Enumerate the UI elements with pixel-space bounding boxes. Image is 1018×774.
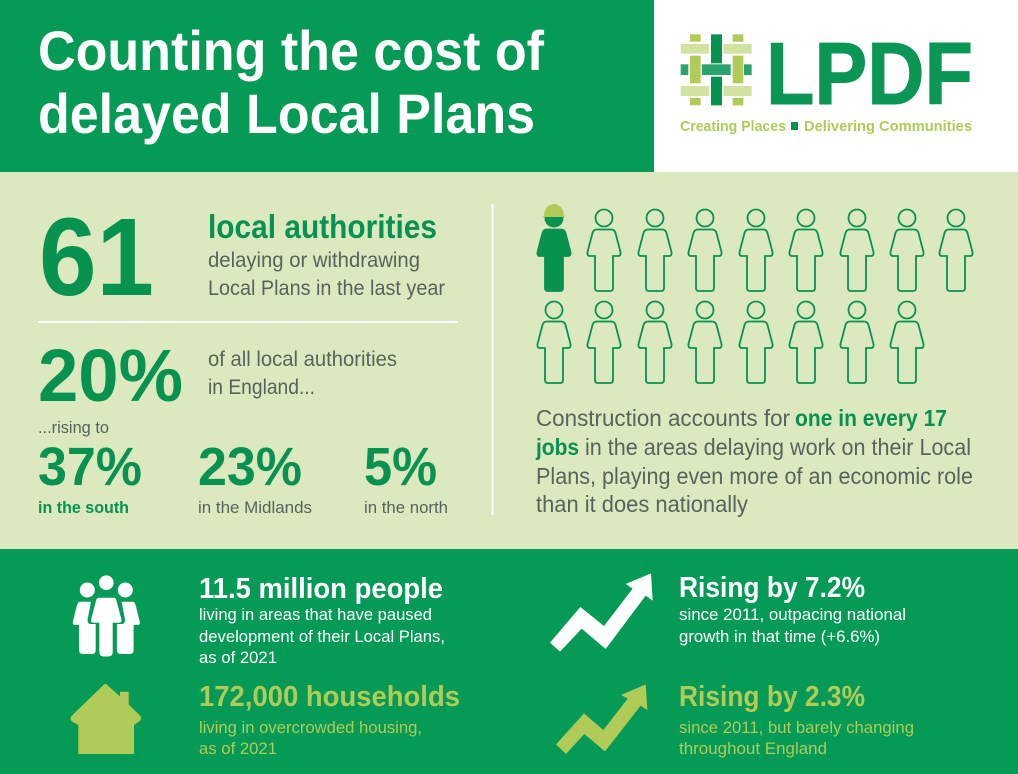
stat: 61 local authorities: local authorities xyxy=(208,208,437,245)
title xyxy=(38,19,544,145)
arrow: rising white xyxy=(550,573,653,652)
text: construction paragraph xyxy=(535,405,973,517)
stat: 61 local authorities: Local Plans in the last year xyxy=(208,277,445,300)
chart: one in 17 jobs pictogram xyxy=(537,204,973,383)
panel: local authority statistics xyxy=(0,172,1018,549)
text: 11.5 million people: development of their Local Plans, xyxy=(199,627,445,646)
panel: people and households xyxy=(0,549,1018,774)
text: rising by 2.3% xyxy=(679,681,914,758)
logo wordmark: LPDF xyxy=(766,24,973,123)
text: 11.5 million people: 11.5 million people xyxy=(199,573,443,605)
text: 172,000 households: 172,000 households xyxy=(199,681,460,713)
text: rising by 7.2% xyxy=(679,572,906,646)
arrow: rising lime xyxy=(556,684,647,754)
stat: north: in the north xyxy=(364,498,448,517)
text: rising by 7.2%: since 2011, outpacing national xyxy=(679,605,906,624)
text: rising by 2.3%: since 2011, but barely changing xyxy=(679,718,914,737)
text: 172,000 households: as of 2021 xyxy=(199,739,277,758)
stat: Midlands: 23% xyxy=(198,437,302,497)
text: construction paragraph: Plans, playing even more of an economic role xyxy=(536,463,973,489)
text: 172,000 households: living in overcrowded housing, xyxy=(199,718,422,737)
text: construction paragraph: Construction accounts for xyxy=(536,405,790,431)
text: construction paragraph: than it does nationally xyxy=(536,491,748,517)
stat: north xyxy=(364,437,448,517)
text: 172,000 households xyxy=(199,681,460,758)
icon: group of people xyxy=(73,575,140,656)
logo tagline: Delivering Communities xyxy=(804,118,972,135)
text: construction paragraph: jobs xyxy=(535,434,579,460)
stat: 20 percent: in England... xyxy=(208,376,315,399)
stat: 20 percent: 20% xyxy=(38,334,183,417)
stat: 61 local authorities xyxy=(39,196,445,319)
text: rising by 7.2%: Rising by 7.2% xyxy=(679,572,865,604)
title: delayed Local Plans xyxy=(38,82,535,145)
text: construction paragraph: in the areas delaying work on their Local xyxy=(585,434,971,460)
title: Counting the cost of xyxy=(38,19,544,82)
stat: Midlands: in the Midlands xyxy=(198,498,312,517)
text: 11.5 million people: as of 2021 xyxy=(199,648,277,667)
logo tagline xyxy=(680,118,972,135)
stat: 61 local authorities: delaying or withdrawing xyxy=(208,249,420,272)
icon: woven hash mark xyxy=(681,34,752,105)
text: 11.5 million people xyxy=(199,573,445,667)
icon: construction worker xyxy=(537,204,571,291)
text: 11.5 million people: living in areas that have paused xyxy=(199,605,432,624)
icon: house xyxy=(71,684,141,754)
panel: header xyxy=(0,0,1018,172)
stat: south: 37% xyxy=(38,437,142,497)
stat: south: in the south xyxy=(38,498,129,517)
logo tagline: Creating Places xyxy=(680,118,786,135)
stat: north: 5% xyxy=(364,437,437,497)
stat: 20 percent xyxy=(38,334,397,417)
logo: LPDF xyxy=(680,24,973,135)
text: construction paragraph: one in every 17 xyxy=(795,405,947,431)
text: rising to: ...rising to xyxy=(38,418,109,437)
stat: 20 percent: of all local authorities xyxy=(208,348,397,371)
text: rising by 2.3%: Rising by 2.3% xyxy=(679,681,865,713)
text: rising by 7.2%: growth in that time (+6.6%) xyxy=(679,627,880,646)
stat: 61 local authorities: 61 xyxy=(39,196,154,319)
text: rising by 2.3%: throughout England xyxy=(679,739,827,758)
